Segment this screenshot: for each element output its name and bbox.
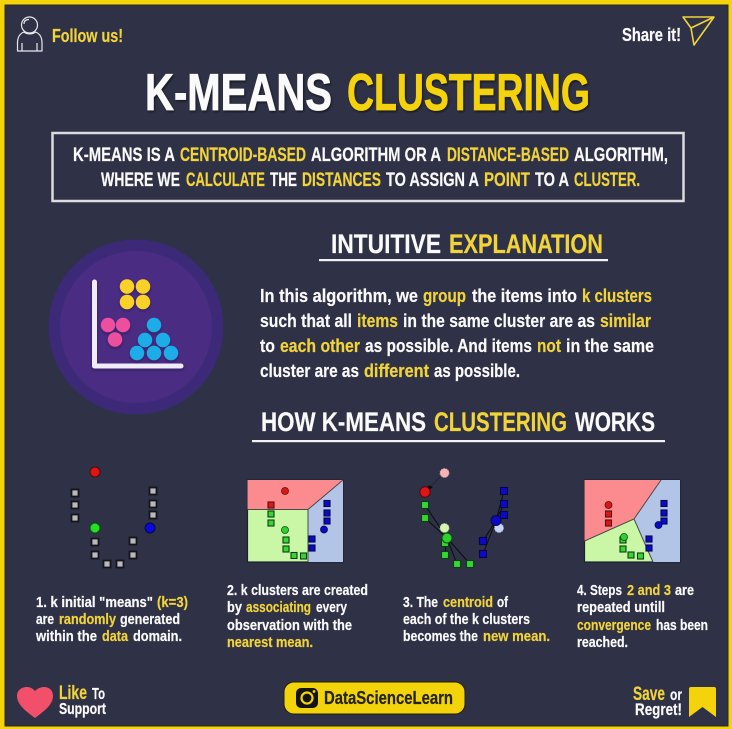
blue cluster [130, 318, 178, 360]
definition line 1: CENTROID-BASED [180, 144, 306, 166]
caption step 4: repeated untill [577, 600, 665, 616]
intuitive explanation paragraph: not [537, 335, 561, 356]
caption step 3 [403, 595, 550, 645]
caption step 1: generated [120, 612, 180, 628]
heading: how k-means clustering works: WORKS [575, 407, 655, 437]
intuitive explanation paragraph: similar [600, 310, 651, 331]
definition line 1 [73, 144, 668, 166]
intuitive explanation paragraph: k clusters [582, 285, 652, 306]
diagram step 1: initial means [72, 467, 156, 568]
title: CLUSTERING [347, 64, 590, 122]
caption step 3: of [497, 595, 508, 611]
caption step 1: (k=3) [157, 595, 188, 611]
definition line 2: DISTANCES [302, 169, 381, 191]
pink cluster [101, 318, 130, 347]
definition line 1: ALGORITHM, [574, 144, 668, 166]
save or regret label: Save [633, 684, 665, 705]
follow us label: Follow us! [52, 26, 123, 46]
save or regret label: Regret! [635, 700, 682, 719]
like to support label: Support [59, 701, 106, 718]
caption step 2: every [316, 600, 347, 616]
save or regret label [633, 684, 682, 719]
definition line 2: CALCULATE [186, 169, 265, 191]
intuitive explanation paragraph [260, 285, 654, 381]
caption step 3: becomes the [403, 629, 478, 645]
caption step 4: 2 and 3 [627, 583, 671, 599]
icon: paper plane [683, 17, 714, 45]
handle text: DataScienceLearn [324, 688, 453, 708]
caption step 2: observation with the [227, 618, 352, 634]
caption step 1: data [102, 629, 129, 645]
caption step 3: 3. The [403, 595, 438, 611]
definition line 2 [101, 169, 640, 191]
like to support label: To [92, 686, 105, 703]
caption step 2: by [227, 600, 242, 616]
caption step 4: 4. Steps [577, 583, 622, 599]
heading: how k-means clustering works: HOW K-MEANS [261, 407, 426, 437]
title [145, 64, 590, 122]
definition line 1: K-MEANS IS A [73, 144, 175, 166]
definition line 2: TO ASSIGN A [386, 169, 479, 191]
intuitive explanation paragraph: to [260, 335, 275, 356]
save or regret label: or [670, 687, 682, 704]
intuitive explanation paragraph: In this algorithm, we [260, 285, 418, 306]
definition line 1: ALGORITHM OR A [311, 144, 441, 166]
caption step 4: reached. [577, 635, 628, 651]
definition line 1: DISTANCE-BASED [447, 144, 569, 166]
caption step 1: are [36, 612, 54, 628]
instagram handle pill [284, 682, 465, 714]
icon: heart [17, 687, 53, 718]
definition box [52, 133, 684, 201]
caption step 4 [577, 583, 708, 651]
chart axes [94, 282, 181, 366]
icon: follow person [18, 17, 42, 51]
heading: intuitive explanation [319, 229, 608, 261]
heading: how k-means clustering works [252, 407, 665, 442]
caption step 2: 2. k clusters are created [227, 583, 368, 599]
definition line 2: WHERE WE [101, 169, 180, 191]
caption step 1: domain. [133, 629, 182, 645]
caption step 3: centroid [443, 595, 493, 611]
caption step 2 [227, 583, 368, 651]
caption step 4: has been [656, 618, 708, 634]
intuitive explanation paragraph: items [357, 310, 398, 331]
definition line 2: THE [270, 169, 297, 191]
caption step 1: within the [35, 629, 97, 645]
intuitive explanation paragraph: as possible. And items [365, 335, 532, 356]
intuitive explanation paragraph: different [364, 360, 429, 381]
intuitive explanation paragraph: such that all [260, 310, 352, 331]
caption step 3: new mean. [483, 629, 550, 645]
title: K-MEANS [145, 64, 332, 122]
intuitive explanation paragraph: in the same cluster are as [403, 310, 595, 331]
caption step 3: each of the k clusters [403, 612, 530, 628]
diagram step 3: new centroids [420, 468, 508, 568]
intuitive explanation paragraph: cluster are as [260, 360, 359, 381]
icon: instagram [296, 688, 318, 708]
definition line 2: TO A [535, 169, 569, 191]
share it label: Share it! [622, 25, 681, 45]
intuitive explanation paragraph: group [423, 285, 466, 306]
caption step 4: are [675, 583, 694, 599]
heading: intuitive explanation: INTUITIVE [331, 229, 441, 259]
icon: bookmark [689, 687, 716, 717]
like to support label: Like [59, 683, 87, 704]
caption step 4: convergence [577, 618, 651, 634]
caption step 2: associating [246, 600, 311, 616]
intuitive explanation paragraph: each other [280, 335, 360, 356]
caption step 2: nearest mean. [227, 635, 313, 651]
heading: how k-means clustering works: CLUSTERING [434, 407, 567, 437]
intuitive explanation paragraph: the items into [472, 285, 577, 306]
caption step 1: 1. k initial "means" [36, 595, 153, 611]
icon: scatter plot badge [48, 240, 224, 414]
diagram step 2: voronoi assignment [248, 480, 343, 562]
caption step 1: randomly [59, 612, 116, 628]
heading: intuitive explanation: EXPLANATION [449, 229, 603, 259]
caption step 1 [35, 595, 188, 645]
yellow cluster [120, 279, 150, 309]
definition line 2: CLUSTER. [574, 169, 640, 191]
like to support label [59, 683, 106, 718]
definition line 2: POINT [484, 169, 530, 191]
intuitive explanation paragraph: in the same [566, 335, 654, 356]
diagram step 4: convergence [584, 480, 680, 562]
intuitive explanation paragraph: as possible. [434, 360, 520, 381]
